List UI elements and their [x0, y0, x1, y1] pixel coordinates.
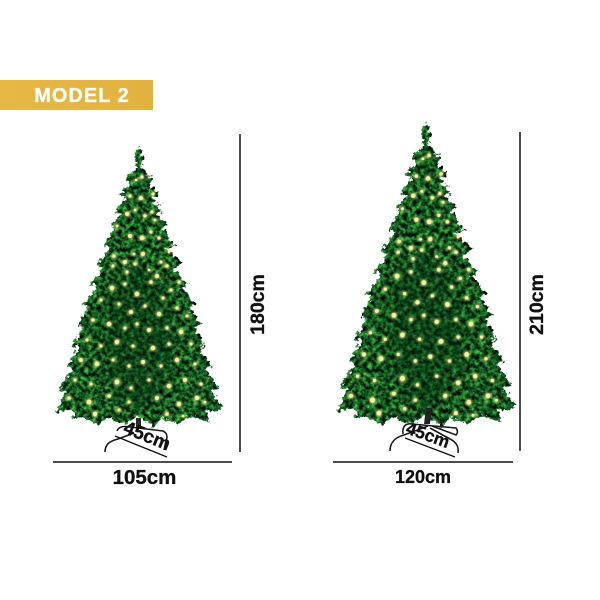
- tree 2: 210cm with warm lights: [336, 124, 516, 426]
- model label banner: [0, 80, 153, 110]
- tree 1: 180cm with warm lights: [55, 148, 223, 426]
- tree 1 metal stand: [105, 418, 167, 452]
- tree 2 metal stand: [390, 408, 458, 453]
- tree 2 height dimension: 210cm: 210cm: [526, 274, 548, 335]
- tree 1 depth dimension: 45cm: 45cm: [120, 418, 173, 455]
- tree 2 width dimension: 120cm: 120cm: [395, 467, 451, 487]
- tree 2 depth dimension: 45cm: 45cm: [404, 418, 452, 452]
- tree 1 height dimension: 180cm: 180cm: [247, 274, 269, 335]
- model label banner: MODEL 2: [34, 85, 130, 107]
- tree 1 width dimension: 105cm: 105cm: [113, 466, 176, 489]
